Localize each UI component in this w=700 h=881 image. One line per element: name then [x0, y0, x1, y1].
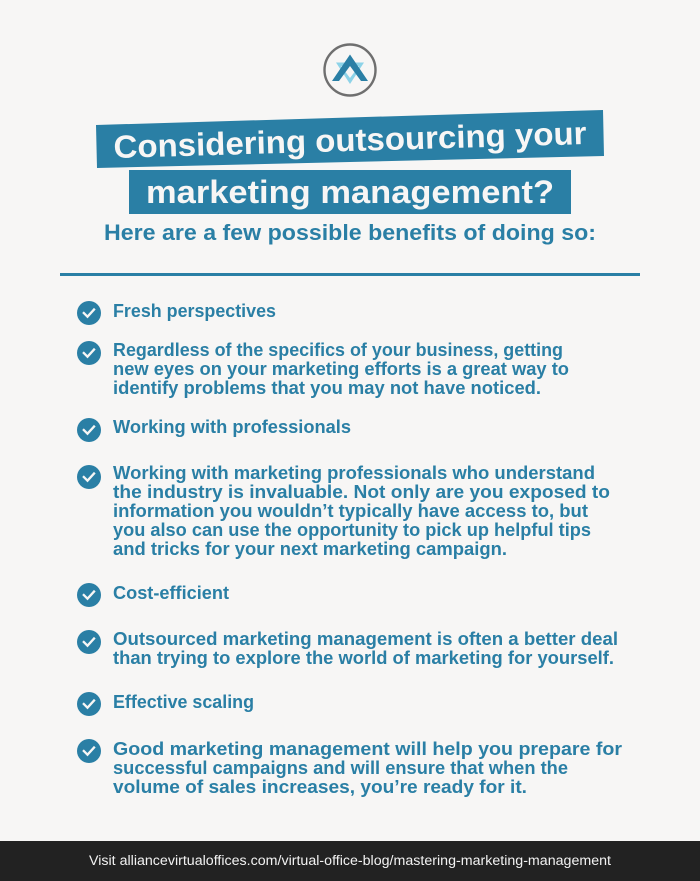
benefit: working with professionals heading: Working with professionals [113, 416, 351, 437]
benefit: effective scaling description: Good marketing management will help you prepare for [113, 738, 622, 759]
benefit: working with professionals description: information you wouldn’t typically have access to, but [113, 500, 588, 521]
benefit: effective scaling heading [77, 691, 254, 716]
benefit: effective scaling description: volume of sales increases, you’re ready for it. [113, 776, 527, 797]
title banner: line two: marketing management? [146, 174, 554, 210]
benefit: working with professionals description: you also can use the opportunity to pick up helpful tips [113, 519, 591, 540]
subtitle: Here are a few possible benefits of doing so: [104, 220, 596, 245]
benefit: fresh perspectives description: new eyes on your marketing efforts is a great way to [113, 358, 569, 379]
benefit: fresh perspectives description: identify problems that you may not have noticed. [113, 377, 541, 398]
benefit: fresh perspectives heading [77, 300, 276, 325]
benefit: working with professionals description: Working with marketing professionals who understand [113, 462, 595, 483]
benefit: cost-efficient heading [77, 582, 229, 607]
benefit: cost-efficient heading: Cost-efficient [113, 582, 229, 603]
benefit: working with professionals heading [77, 416, 351, 442]
benefit: cost-efficient description: than trying to explore the world of marketing for yourself. [113, 647, 614, 668]
benefit: working with professionals description [77, 462, 610, 559]
benefit: effective scaling heading: Effective scaling [113, 691, 254, 712]
icon: logo [324, 44, 376, 96]
benefit: working with professionals description: and tricks for your next marketing campaign. [113, 538, 507, 559]
benefit: fresh perspectives description: Regardless of the specifics of your business, getting [113, 339, 563, 360]
benefit: cost-efficient description: Outsourced marketing management is often a better deal [113, 628, 618, 649]
footer bar [0, 841, 700, 881]
benefit: fresh perspectives description [77, 339, 569, 398]
benefit: cost-efficient description [77, 628, 618, 668]
footer bar: Visit alliancevirtualoffices.com/virtual-office-blog/mastering-marketing-management [89, 853, 611, 868]
title banner: line one: Considering outsourcing your [113, 115, 587, 165]
benefit: effective scaling description [77, 738, 622, 797]
benefit: effective scaling description: successful campaigns and will ensure that when the [113, 757, 568, 778]
benefit: working with professionals description: the industry is invaluable. Not only are you exposed to [113, 481, 610, 502]
benefit: fresh perspectives heading: Fresh perspectives [113, 300, 276, 321]
